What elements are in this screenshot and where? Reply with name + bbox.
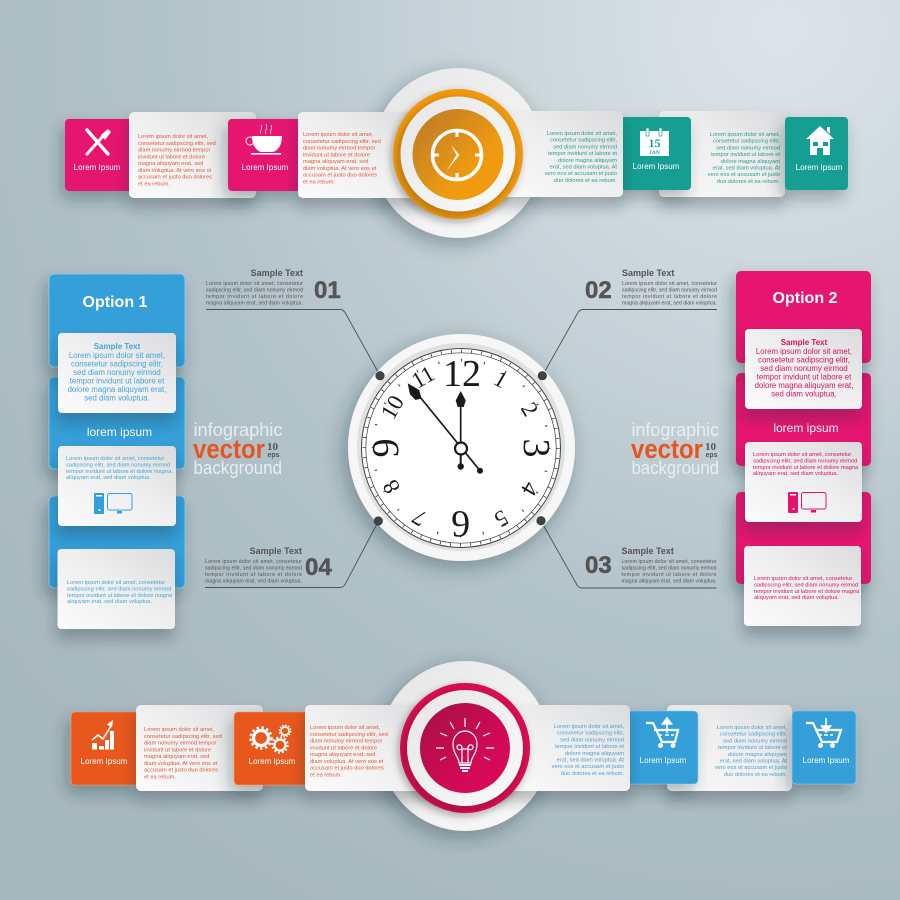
card: top 2: consetetur sadipscing elitr, sed [303, 139, 381, 145]
card: bottom 3: vero eos et accusam et justo [552, 764, 624, 770]
callout 03: 03 [585, 552, 612, 579]
card: bottom 1: accusam et justo duo dolores [144, 768, 218, 774]
icon: light bulb [436, 718, 494, 771]
label: lorem ipsum: lorem ipsum [773, 421, 839, 435]
card: sample text: Lorem ipsum dolor sit amet, [69, 351, 165, 360]
card: top 1: et ea rebum. [138, 181, 170, 187]
pink tab 2 [736, 373, 871, 466]
icon: computer [94, 493, 132, 514]
card: computer: sadipscing elitr, sed diam nonumy eirmod [753, 458, 857, 464]
card: computer: tempor invidunt ut labore et dolore magna [753, 465, 859, 471]
card: sample text: dolore magna aliquyam erat, [68, 385, 166, 394]
card: bottom 1: et ea rebum. [144, 774, 176, 780]
callout 01: magna aliquyam erat, sed diam voluptua. [206, 300, 303, 306]
callout 02: magna aliquyam erat, sed diam voluptua. [622, 300, 717, 306]
card: top 2: magna aliquyam erat, sed [303, 159, 368, 165]
card: top 1: consetetur sadipscing elitr, sed [138, 141, 216, 147]
white ring [400, 96, 516, 212]
card: top 4: consetetur sadipscing elitr, [713, 139, 780, 145]
clock numerals: 12 [443, 353, 481, 395]
card: lower note: tempor invidunt ut labore et dolore magna [67, 593, 173, 599]
card: lower note: aliquyam erat, sed diam voluptua. [754, 595, 839, 601]
box: calendar [620, 117, 691, 190]
clock numerals: 2 [516, 398, 543, 420]
card: top 4: sed diam nonumy eirmod [716, 145, 780, 151]
card: top 1: Lorem ipsum dolor sit amet, [138, 134, 209, 140]
brand text left: 10 [267, 441, 278, 453]
card: bottom 4: tempor invidunt ut labore et [718, 745, 787, 751]
card: bottom 1: diam nonumy eirmod tempor [144, 740, 216, 746]
card: lower note: aliquyam erat, sed diam voluptua. [67, 599, 152, 605]
card: top 3 [490, 111, 623, 197]
box: gears [234, 712, 310, 785]
heading: Option 1: Option 1 [83, 294, 148, 311]
card: lower note: Lorem ipsum dolor sit amet, consetetur [754, 576, 852, 582]
card: computer: Lorem ipsum dolor sit amet, consetetur [66, 456, 164, 462]
brand text right: vector [631, 434, 703, 464]
white ring [407, 690, 523, 806]
callout 02: sadipscing elitr, sed diam nonumy eirmod [622, 288, 717, 294]
blue tab 1 [49, 274, 185, 367]
box: cart down [792, 711, 856, 784]
clock numerals [365, 353, 557, 544]
card: sample text: dolore magna aliquyam erat, [755, 381, 853, 390]
blue tab 2 [49, 377, 185, 469]
card: bottom 2: invidunt ut labore et dolore [310, 745, 377, 751]
box: gears: Lorem Ipsum [249, 757, 296, 766]
icon: computer [788, 492, 826, 513]
box: growth chart [71, 712, 141, 785]
card: top 3: vero eos et accusam et justo [545, 171, 617, 177]
wall clock [348, 334, 575, 561]
bottom disc [380, 661, 550, 831]
callout 03: magna aliquyam erat, sed diam voluptua. [622, 578, 716, 584]
panel: top timeline band [65, 68, 848, 238]
magenta ring [400, 683, 530, 813]
card: top 3: sed diam nonumy eirmod [553, 144, 617, 150]
card: top 2 [298, 112, 428, 198]
card: bottom 4: consetetur sadipscing elitr, [720, 732, 787, 738]
card: top 2: invidunt ut labore et dolore [303, 152, 370, 158]
connector lines [205, 310, 717, 588]
card: bottom 3: erat, sed diam voluptua. At [557, 758, 624, 764]
card: bottom 1: Lorem ipsum dolor sit amet, [144, 727, 215, 733]
card: bottom 4: Lorem ipsum dolor sit amet, [717, 725, 787, 731]
clock numerals: 9 [365, 438, 407, 458]
card: sample text: Lorem ipsum dolor sit amet, [756, 347, 852, 356]
callout 01 [206, 268, 341, 306]
blue tab 3 [49, 496, 185, 588]
callout 04 [205, 546, 332, 584]
icon: clock [432, 130, 482, 180]
top disc [373, 68, 543, 238]
box: calendar: JAN [649, 150, 660, 156]
callout 01: tempor invidunt ut labore et dolore [206, 294, 303, 300]
clock numerals: 6 [451, 502, 470, 544]
card: sample text: tempor invidunt ut labore et [757, 372, 852, 382]
card: bottom 2: accusam et justo duo dolores [310, 766, 384, 772]
card: sample text: sed diam voluptua. [771, 390, 837, 398]
card: top 3: consetetur sadipscing elitr, [550, 138, 617, 144]
card: bottom 2: consetetur sadipscing elitr, sed [310, 732, 388, 738]
card: top 3: erat, sed diam voluptua. At [550, 164, 617, 170]
card: top 2: diam nonumy eirmod tempor [303, 146, 375, 152]
clock numerals: 10 [376, 391, 409, 423]
card: bottom 3: Lorem ipsum dolor sit amet, [554, 724, 624, 730]
callout 04: 04 [305, 554, 332, 581]
card: bottom 1: magna aliquyam erat, sed [144, 754, 209, 760]
card: bottom 3: tempor invidunt ut labore et [555, 744, 624, 750]
brand text right [631, 420, 719, 478]
box: home: Lorem Ipsum [796, 163, 843, 172]
callout 04: Lorem ipsum dolor sit amet, consetetur [205, 559, 302, 565]
callout 01: Lorem ipsum dolor sit amet, consetetur [206, 281, 303, 287]
card: lower note: Lorem ipsum dolor sit amet, consetetur [67, 580, 165, 586]
box: calendar: Lorem Ipsum [633, 162, 680, 171]
card: bottom 2: magna aliquyam erat, sed [310, 752, 375, 758]
card: sample text: consetetur sadipscing elitr, [758, 356, 850, 364]
card: sample text: sed diam nonumy eirmod [760, 364, 848, 373]
magenta core [420, 703, 510, 793]
card: top 1 [129, 112, 256, 198]
brand text right: background [632, 458, 719, 478]
card: bottom 2 [305, 705, 435, 791]
brand text right: infographic [632, 420, 719, 440]
callout 02: Lorem ipsum dolor sit amet, consetetur [622, 281, 717, 287]
card: sample text [58, 333, 176, 413]
card: top 4: duo dolores et ea rebum. [717, 179, 780, 185]
card: top 4: erat, sed diam voluptua. At [713, 166, 780, 172]
card: bottom 3: sed diam nonumy eirmod [560, 737, 624, 743]
card: top 4: dolore magna aliquyam [721, 159, 780, 165]
card: bottom 3: consetetur sadipscing elitr, [557, 731, 624, 737]
clock numerals: 11 [407, 361, 439, 393]
clock numerals: 5 [490, 505, 513, 532]
box: coffee: Lorem Ipsum [242, 163, 289, 172]
box: cutlery: Lorem Ipsum [74, 163, 121, 172]
card: bottom 2: et ea rebum. [310, 772, 342, 778]
card: bottom 1: diam voluptua. At vero eos et [144, 761, 218, 767]
card: top 3: duo dolores et ea rebum. [554, 178, 617, 184]
card: top 4: Lorem ipsum dolor sit amet, [710, 132, 780, 138]
orange ring [393, 89, 523, 219]
card: bottom 4: dolore magna aliquyam [728, 752, 787, 758]
card: lower note [744, 546, 861, 626]
callout 03: Lorem ipsum dolor sit amet, consetetur [622, 559, 717, 565]
card: computer: sadipscing elitr, sed diam nonumy eirmod [66, 462, 170, 468]
clock numerals: 1 [490, 366, 512, 393]
box: growth chart: Lorem Ipsum [81, 757, 128, 766]
card: top 1: diam nonumy eirmod tempor [138, 148, 210, 154]
card: computer: tempor invidunt ut labore et dolore magna [66, 469, 172, 475]
clock body [348, 334, 575, 561]
box: coffee [228, 119, 303, 191]
callout 01: 01 [314, 277, 341, 304]
callout 02: Sample Text [622, 268, 674, 278]
brand text left: background [194, 458, 282, 478]
card: top 4: vero eos et accusam et justo [708, 172, 780, 178]
card: top 3: Lorem ipsum dolor sit amet, [547, 131, 617, 137]
panel: bottom timeline band [71, 661, 856, 831]
brand text left: vector [193, 434, 265, 464]
card: top 1: invidunt ut labore et dolore [138, 154, 205, 160]
card: top 2: Lorem ipsum dolor sit amet, [303, 132, 374, 138]
callout 03: tempor invidunt ut labore et dolore [622, 572, 717, 578]
card: computer: aliquyam erat, sed diam voluptua. [753, 471, 838, 477]
callout 02: tempor invidunt ut labore et dolore [622, 294, 717, 300]
callout 02 [585, 268, 717, 306]
callout 03 [585, 546, 717, 584]
brand text left: eps [268, 452, 280, 459]
brand text left: infographic [194, 420, 282, 440]
clock face [362, 348, 560, 548]
card: lower note: tempor invidunt ut labore et dolore magna [754, 589, 860, 595]
card: lower note [58, 549, 175, 629]
card: bottom 2: diam voluptua. At vero eos et [310, 759, 384, 765]
card: sample text: tempor invidunt ut labore et [70, 376, 165, 386]
card: bottom 1: consetetur sadipscing elitr, sed [144, 734, 222, 740]
brand text left [193, 420, 282, 478]
card: bottom 4: duo dolores et ea rebum. [724, 772, 787, 778]
callout 04: Sample Text [250, 546, 302, 556]
card: sample text: Sample Text [94, 342, 141, 351]
card: bottom 3: dolore magna aliquyam [565, 751, 624, 757]
callout 01: sadipscing elitr, sed diam nonumy eirmod [206, 288, 303, 294]
card: computer [745, 442, 862, 522]
callout 04: tempor invidunt ut labore et dolore [205, 572, 302, 578]
heading: Option 2: Option 2 [773, 290, 838, 307]
card: top 1: diam voluptua. At vero eos et [138, 168, 212, 174]
box: cart up: Lorem Ipsum [640, 756, 687, 765]
card: top 1: accusam et justo duo dolores [138, 174, 212, 180]
pink tab 3 [736, 492, 871, 584]
panel: option 1 [49, 274, 185, 629]
card: top 1: magna aliquyam erat, sed [138, 161, 203, 167]
card: lower note: sadipscing elitr, sed diam nonumy eirmod [67, 586, 171, 592]
clock numerals: 8 [378, 476, 405, 498]
card: sample text: sed diam voluptua. [84, 394, 150, 402]
box: cutlery [65, 119, 135, 191]
card: sample text: sed diam nonumy eirmod [73, 368, 161, 377]
card: bottom 2: Lorem ipsum dolor sit amet, [310, 725, 381, 731]
callout 02: 02 [585, 277, 612, 304]
card: bottom 3 [495, 705, 630, 791]
card: computer: aliquyam erat, sed diam voluptua. [66, 475, 151, 481]
card: top 3: tempor invidunt ut labore et [548, 151, 617, 157]
card: top 4 [659, 111, 785, 197]
box: calendar: 15 [648, 136, 660, 150]
brand text right: eps [706, 452, 718, 459]
card: computer [58, 446, 176, 526]
card: bottom 3: duo dolores et ea rebum. [561, 771, 624, 777]
card: bottom 1: invidunt ut labore et dolore [144, 747, 211, 753]
card: top 4: tempor invidunt ut labore et [711, 152, 780, 158]
panel: option 2 [736, 271, 871, 626]
card: lower note: sadipscing elitr, sed diam nonumy eirmod [754, 582, 858, 588]
clock hands [408, 383, 483, 474]
card: top 3: dolore magna aliquyam [558, 158, 617, 164]
card: sample text [745, 329, 862, 409]
clock numerals: 7 [408, 504, 430, 531]
card: top 2: accusam et justo duo dolores [303, 172, 377, 178]
callout 01: Sample Text [251, 268, 303, 278]
card: computer: Lorem ipsum dolor sit amet, consetetur [753, 452, 851, 458]
card: bottom 4 [667, 705, 792, 791]
label: lorem ipsum: lorem ipsum [87, 425, 152, 439]
card: sample text: consetetur sadipscing elitr, [71, 360, 163, 368]
card: sample text: Sample Text [781, 338, 828, 347]
pink tab 1 [736, 271, 871, 363]
callout 03: sadipscing elitr, sed diam nonumy eirmod [622, 566, 717, 572]
callout 04: magna aliquyam erat, sed diam voluptua. [205, 578, 302, 584]
card: bottom 4: erat, sed diam voluptua. At [720, 758, 787, 764]
card: bottom 2: diam nonumy eirmod tempor [310, 738, 382, 744]
callout 04: sadipscing elitr, sed diam nonumy eirmod [205, 566, 302, 572]
box: cart up [627, 711, 698, 784]
box: home [785, 117, 848, 190]
card: top 2: et ea rebum. [303, 179, 335, 185]
card: bottom 1 [136, 705, 263, 791]
callout 03: Sample Text [622, 546, 674, 556]
orange core [412, 109, 504, 200]
card: bottom 4: sed diam nonumy eirmod [723, 738, 787, 744]
clock numerals: 3 [515, 438, 557, 458]
card: top 2: diam voluptua. At vero eos et [303, 166, 377, 172]
brand text right: 10 [705, 441, 716, 453]
connector dots [374, 371, 547, 526]
box: cart down: Lorem Ipsum [803, 756, 850, 765]
clock numerals: 4 [516, 478, 543, 500]
card: bottom 4: vero eos et accusam et justo [715, 765, 787, 771]
clock bezel [357, 343, 565, 551]
